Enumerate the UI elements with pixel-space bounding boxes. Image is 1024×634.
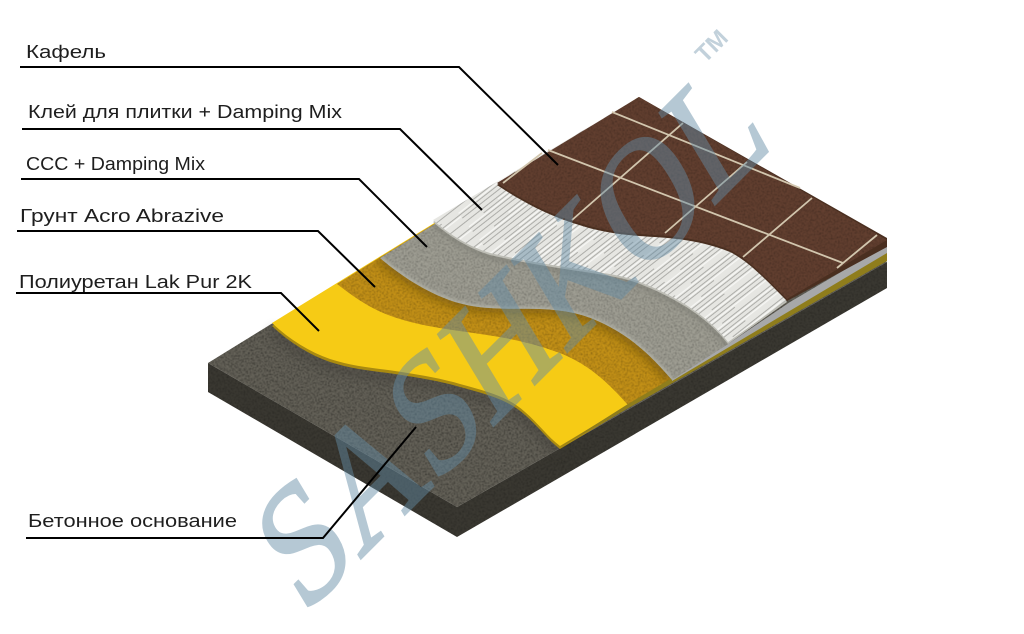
olive edge band	[560, 252, 887, 447]
levelling compound grey layer	[380, 224, 728, 380]
label: Клей для плитки + Damping Mix: Клей для плитки + Damping Mix	[28, 102, 342, 122]
tile grout lines	[503, 112, 877, 268]
label: Бетонное основание	[26, 427, 416, 538]
polyurethane yellow layer	[272, 97, 639, 449]
primer orange layer	[337, 97, 672, 405]
label: Клей для плитки + Damping Mix	[22, 102, 482, 210]
ceramic tile layer	[497, 97, 887, 301]
label: Полиуретан Lak Pur 2K	[16, 272, 319, 331]
watermark SASHKOL: SASHKOL	[229, 22, 793, 634]
label: Грунт Acro Abrazive	[17, 206, 375, 287]
label: Полиуретан Lak Pur 2K: Полиуретан Lak Pur 2K	[19, 272, 252, 292]
label: ССС + Damping Mix: ССС + Damping Mix	[26, 154, 205, 174]
label: Кафель	[20, 42, 558, 165]
label: Кафель: Кафель	[26, 42, 106, 62]
floor layers infographic	[16, 29, 887, 608]
label: Бетонное основание: Бетонное основание	[28, 511, 237, 531]
tile adhesive white combed layer	[433, 97, 787, 344]
label: ССС + Damping Mix	[21, 154, 427, 247]
label: Грунт Acro Abrazive: Грунт Acro Abrazive	[20, 206, 224, 226]
watermark trademark: TM	[690, 25, 734, 68]
concrete base slab	[208, 97, 887, 537]
grey under-tile edge band	[672, 245, 887, 381]
